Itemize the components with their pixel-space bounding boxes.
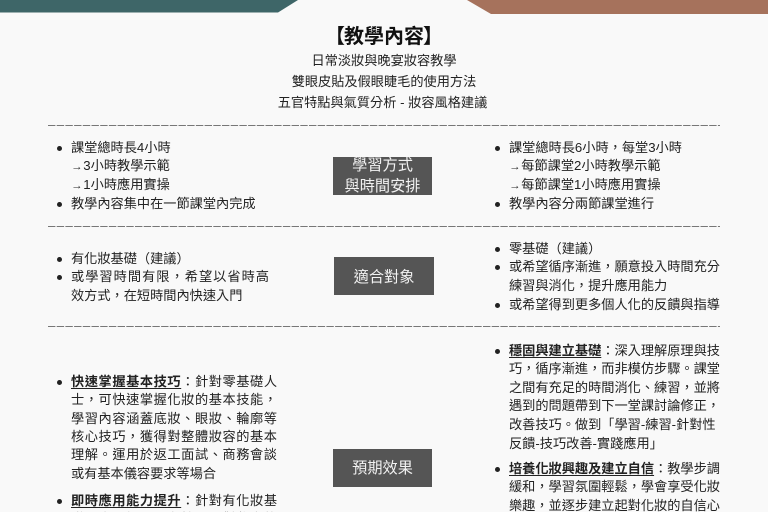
row 3 right: expected results, long course: 遇到的問題帶到下一堂課討論修正， bbox=[509, 398, 720, 413]
row 1 right: long course schedule: 每節課堂2小時教學示範 bbox=[521, 158, 661, 173]
row 1 left: short course schedule: 1小時應用實操 bbox=[83, 177, 170, 192]
row 3 left: expected results, short course bbox=[57, 374, 277, 512]
row 1 left: short course schedule bbox=[57, 140, 256, 211]
row 3 label: expected results bbox=[333, 449, 432, 487]
row 1 right: long course schedule: → bbox=[509, 161, 520, 173]
subtitle: course topics bbox=[278, 53, 487, 110]
row 3 left: expected results, short course: 理解。運用於返工面試、商務會談 bbox=[71, 447, 277, 462]
subtitle: course topics: 雙眼皮貼及假眼睫毛的使用方法 bbox=[292, 74, 476, 89]
row 3 left: expected results, short course: 快速掌握基本技巧：針對零基礎人 bbox=[71, 374, 277, 389]
row 3 right: expected results, long course: 之間有充足的時間消化、練習，並將 bbox=[509, 380, 720, 395]
row 3 left: expected results, short course: 士，可快速掌握化妝的基本技能， bbox=[71, 392, 277, 407]
row 3 right: expected results, long course bbox=[495, 342, 720, 512]
row 3 left: expected results, short course: 學習內容涵蓋底妝、眼妝、輪廓等 bbox=[71, 411, 277, 426]
row 1 left: short course schedule: 課堂總時長4小時 bbox=[71, 140, 171, 155]
row 1 right: long course schedule: 課堂總時長6小時，每堂3小時 bbox=[509, 140, 682, 155]
row 1 label: learning format and schedule: 與時間安排 bbox=[345, 178, 420, 194]
row 1 left: short course schedule: 3小時教學示範 bbox=[83, 158, 170, 173]
row 2 left: suitable audience, short course bbox=[57, 251, 269, 303]
row 3 label: expected results: 預期效果 bbox=[352, 460, 413, 477]
row 1 label: learning format and schedule bbox=[333, 156, 432, 194]
row 3 left: expected results, short course: 或有基本儀容要求等場合 bbox=[71, 466, 216, 481]
row 1 left: short course schedule: → bbox=[71, 161, 82, 173]
subtitle: course topics: 五官特點與氣質分析 - 妝容風格建議 bbox=[278, 95, 487, 110]
row 3 right: expected results, long course: 緩和，學習氛圍輕鬆，學會享受化妝 bbox=[509, 479, 720, 494]
row 3 right: expected results, long course: 培養化妝興趣及建立自信：教學步調 bbox=[509, 461, 720, 476]
row 3 right: expected results, long course: 巧，循序漸進，而非模仿步驟。課堂 bbox=[509, 361, 720, 376]
row 1 left: short course schedule: → bbox=[71, 180, 82, 192]
row 3 left: expected results, short course: 核心技巧，獲得對整體妝容的基本 bbox=[71, 429, 277, 444]
row 1 label: learning format and schedule: 學習方式 bbox=[352, 156, 413, 174]
title: 【教學內容】 bbox=[325, 26, 443, 48]
row 2 left: suitable audience, short course: 效方式，在短時間內快速入門 bbox=[71, 288, 242, 303]
header band: teal bbox=[0, 0, 298, 12]
row 3 left: expected results, short course: 即時應用能力提升：針對有化妝基 bbox=[71, 493, 277, 508]
row 2 right: suitable audience, long course: 零基礎（建議） bbox=[509, 241, 601, 256]
row 2 label: suitable audience: 適合對象 bbox=[354, 269, 414, 286]
row 2 right: suitable audience, long course: 或希望循序漸進，願意投入時間充分 bbox=[509, 259, 720, 274]
row 1 right: long course schedule: → bbox=[509, 180, 520, 192]
row 2 right: suitable audience, long course: 或希望得到更多個人化的反饋與指導 bbox=[509, 297, 720, 312]
row 3 right: expected results, long course: 改善技巧。做到「學習-練習-針對性 bbox=[509, 417, 716, 432]
row 1 right: long course schedule bbox=[495, 140, 682, 211]
row 2 right: suitable audience, long course: 練習與消化，提升應用能力 bbox=[509, 278, 667, 293]
row 1 right: long course schedule: 每節課堂1小時應用實操 bbox=[521, 177, 661, 192]
row 3 right: expected results, long course: 反饋-技巧改善-實踐應用」 bbox=[509, 436, 663, 451]
row 2 left: suitable audience, short course: 有化妝基礎（建議） bbox=[71, 251, 190, 266]
subtitle: course topics: 日常淡妝與晚宴妝容教學 bbox=[311, 53, 457, 68]
header band: brown bbox=[467, 0, 768, 14]
row 1 left: short course schedule: 教學內容集中在一節課堂內完成 bbox=[71, 196, 256, 211]
row 3 right: expected results, long course: 穩固與建立基礎：深入理解原理與技 bbox=[509, 342, 720, 358]
row 2 right: suitable audience, long course bbox=[495, 241, 720, 312]
row 2 left: suitable audience, short course: 或學習時間有限，希望以省時高 bbox=[71, 269, 269, 284]
row 2 label: suitable audience bbox=[334, 257, 434, 295]
row 1 right: long course schedule: 教學內容分兩節課堂進行 bbox=[509, 196, 654, 211]
